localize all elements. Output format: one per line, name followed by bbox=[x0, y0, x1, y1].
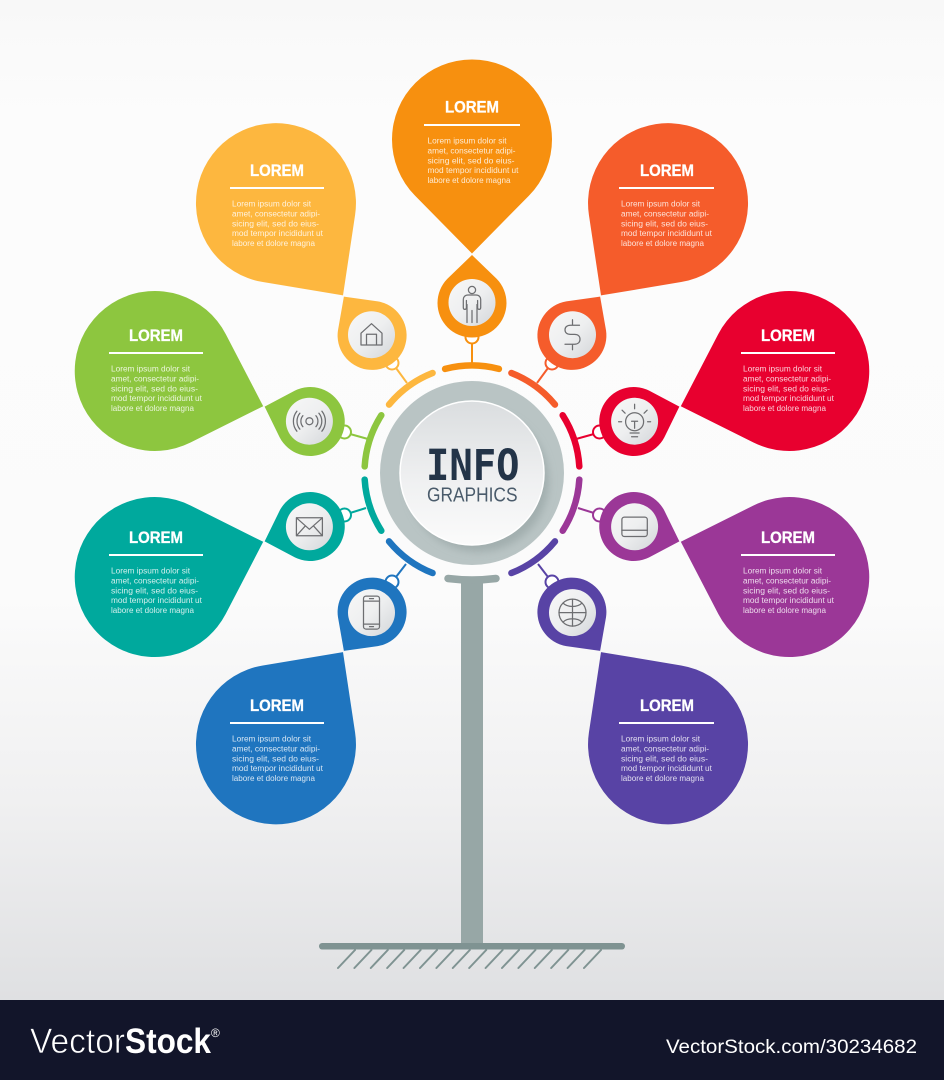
teardrop shapes bbox=[576, 440, 890, 678]
heading rule bbox=[109, 554, 203, 556]
body text: labore et dolore magna bbox=[743, 606, 827, 615]
icon: dollar bbox=[549, 311, 596, 358]
body text: labore et dolore magna bbox=[232, 239, 316, 248]
stem of the tree bbox=[448, 578, 496, 944]
panel: blue bbox=[164, 537, 457, 856]
heading rule bbox=[424, 124, 520, 126]
body text: labore et dolore magna bbox=[232, 774, 316, 783]
body text: mod tempor incididunt ut bbox=[111, 596, 203, 605]
ring segment: blue bbox=[387, 541, 433, 576]
body text bbox=[621, 200, 713, 248]
heading: LOREM bbox=[129, 327, 183, 345]
teardrop shapes bbox=[54, 270, 368, 508]
body text: sicing elit, sed do eius- bbox=[428, 156, 515, 166]
heading rule bbox=[619, 722, 714, 724]
body text: mod tempor incididunt ut bbox=[743, 394, 835, 403]
body text: amet, consectetur adipi- bbox=[621, 210, 709, 218]
connector: red bbox=[576, 426, 606, 439]
body text: sicing elit, sed do eius- bbox=[232, 220, 319, 228]
connector: top orange bbox=[466, 330, 478, 364]
heading: LOREM bbox=[640, 697, 694, 715]
ring segment: purple bbox=[563, 480, 583, 532]
ring segment: green bbox=[361, 414, 381, 466]
body text: Lorem ipsum dolor sit bbox=[428, 136, 507, 146]
panel: red bbox=[576, 270, 890, 508]
footer logo bbox=[30, 1022, 211, 1061]
body text: Lorem ipsum dolor sit bbox=[232, 200, 312, 208]
icon: phone bbox=[348, 589, 395, 636]
heading rule bbox=[741, 554, 835, 556]
body text: sicing elit, sed do eius- bbox=[621, 220, 708, 228]
icon: person bbox=[448, 279, 496, 326]
ring segment: red bbox=[563, 414, 583, 466]
body text: Lorem ipsum dolor sit bbox=[111, 566, 191, 576]
heading rule bbox=[109, 352, 203, 354]
teardrop shapes bbox=[487, 537, 780, 856]
body text: labore et dolore magna bbox=[111, 606, 195, 615]
body text: mod tempor incididunt ut bbox=[621, 764, 713, 773]
body text: Lorem ipsum dolor sit bbox=[621, 734, 701, 744]
hub title: INFO bbox=[426, 441, 520, 491]
central hub bbox=[380, 381, 564, 565]
body text: mod tempor incididunt ut bbox=[232, 764, 324, 773]
heading: LOREM bbox=[445, 98, 499, 116]
body text: sicing elit, sed do eius- bbox=[621, 754, 708, 764]
heading: LOREM bbox=[640, 162, 694, 180]
connector: purple bbox=[578, 508, 606, 522]
panel: yellow bbox=[164, 91, 457, 410]
body text: amet, consectetur adipi- bbox=[428, 146, 516, 156]
heading: LOREM bbox=[129, 529, 183, 547]
hub disc bbox=[400, 401, 544, 545]
heading rule bbox=[619, 187, 714, 189]
body text: sicing elit, sed do eius- bbox=[111, 586, 198, 596]
body text bbox=[111, 364, 203, 413]
body text: labore et dolore magna bbox=[621, 239, 705, 248]
heading: LOREM bbox=[250, 697, 304, 715]
panel: teal bbox=[54, 440, 368, 678]
body text: Lorem ipsum dolor sit bbox=[111, 364, 191, 374]
body text bbox=[232, 734, 324, 783]
connector: indigo bbox=[538, 564, 558, 588]
panel: purple bbox=[576, 440, 890, 678]
icon: basketball bbox=[549, 589, 596, 636]
footer logo: Vector bbox=[30, 1022, 125, 1061]
body text bbox=[232, 200, 324, 248]
body text bbox=[111, 566, 203, 615]
body text bbox=[621, 734, 713, 783]
body text: mod tempor incididunt ut bbox=[428, 166, 519, 175]
teardrop shapes bbox=[164, 537, 457, 856]
body text: amet, consectetur adipi- bbox=[232, 210, 320, 218]
icon: envelope bbox=[286, 503, 333, 550]
connector: blue bbox=[386, 564, 406, 588]
teardrop shapes bbox=[576, 270, 890, 508]
body text: amet, consectetur adipi- bbox=[232, 744, 320, 754]
heading rule bbox=[741, 352, 835, 354]
connector: orange red bbox=[537, 356, 558, 383]
body text: sicing elit, sed do eius- bbox=[111, 384, 198, 394]
ring segment: indigo bbox=[511, 541, 557, 576]
body text: Lorem ipsum dolor sit bbox=[743, 566, 823, 576]
body text: labore et dolore magna bbox=[743, 404, 827, 413]
body text: amet, consectetur adipi- bbox=[743, 576, 831, 586]
footer id: VectorStock.com/30234682 bbox=[666, 1036, 917, 1058]
body text: amet, consectetur adipi- bbox=[111, 374, 199, 384]
body text: sicing elit, sed do eius- bbox=[743, 384, 830, 394]
heading: LOREM bbox=[761, 529, 815, 547]
panel: indigo bbox=[487, 537, 780, 856]
body text: mod tempor incididunt ut bbox=[111, 394, 203, 403]
teardrop shapes bbox=[54, 440, 368, 678]
body text: amet, consectetur adipi- bbox=[621, 744, 709, 754]
heading: LOREM bbox=[761, 327, 815, 345]
ring segment: orange red bbox=[511, 370, 557, 405]
heading rule bbox=[230, 187, 324, 189]
footer logo: Stock bbox=[125, 1022, 211, 1061]
footer bar bbox=[0, 1000, 944, 1080]
heading rule bbox=[230, 722, 324, 724]
teardrop shapes bbox=[164, 91, 457, 410]
body text: sicing elit, sed do eius- bbox=[743, 586, 830, 596]
body text: Lorem ipsum dolor sit bbox=[621, 200, 701, 208]
ring segment: teal bbox=[361, 480, 381, 532]
hub ring bbox=[380, 381, 564, 565]
ring segment: yellow bbox=[387, 370, 433, 405]
icon: signal bbox=[286, 398, 333, 445]
registered mark: ® bbox=[211, 1026, 220, 1040]
body text bbox=[743, 364, 835, 413]
icon: house bbox=[348, 311, 395, 358]
panel: green bbox=[54, 270, 368, 508]
teardrop shapes bbox=[487, 91, 780, 410]
connector: teal bbox=[338, 508, 366, 522]
connector: yellow bbox=[386, 356, 407, 383]
ground line with hatching bbox=[319, 943, 625, 968]
body text: labore et dolore magna bbox=[621, 774, 705, 783]
body text: mod tempor incididunt ut bbox=[232, 229, 324, 238]
body text: mod tempor incididunt ut bbox=[621, 229, 713, 238]
body text: Lorem ipsum dolor sit bbox=[743, 364, 823, 374]
icon: light bulb bbox=[611, 398, 658, 445]
body text bbox=[428, 136, 519, 185]
body text: amet, consectetur adipi- bbox=[743, 374, 831, 384]
hub subtitle: GRAPHICS bbox=[427, 484, 518, 506]
body text bbox=[743, 566, 835, 615]
ring segment: top orange bbox=[445, 365, 499, 369]
body text: labore et dolore magna bbox=[428, 176, 511, 185]
body text: amet, consectetur adipi- bbox=[111, 576, 199, 586]
panel: orange red bbox=[487, 91, 780, 410]
teardrop shapes bbox=[392, 59, 552, 337]
body text: sicing elit, sed do eius- bbox=[232, 754, 319, 764]
icon: card bbox=[611, 503, 658, 550]
heading: LOREM bbox=[250, 162, 304, 180]
panel: top orange bbox=[392, 59, 552, 337]
body text: labore et dolore magna bbox=[111, 404, 195, 413]
body text: mod tempor incididunt ut bbox=[743, 596, 835, 605]
connector: green bbox=[338, 426, 368, 439]
body text: Lorem ipsum dolor sit bbox=[232, 734, 312, 744]
